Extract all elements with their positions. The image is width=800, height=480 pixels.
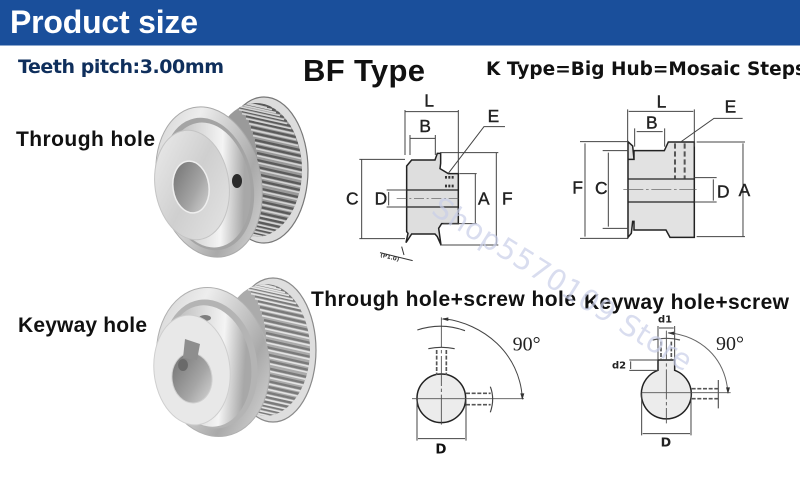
diagram: BF type cross section: F bbox=[502, 188, 513, 208]
diagram: K type cross section: B bbox=[646, 113, 658, 133]
diagram: K type cross section: L bbox=[657, 91, 667, 111]
label: keyway hole: Keyway hole bbox=[18, 314, 147, 337]
diagram: keyway hole with screw bbox=[612, 315, 744, 450]
diagram: K type cross section: F bbox=[572, 177, 583, 197]
diagram: through hole with screw hole: D bbox=[435, 443, 446, 458]
watermark: Shop5570109 Store bbox=[426, 190, 699, 378]
K type note: K Type=Big Hub=Mosaic Steps bbox=[486, 59, 800, 80]
label: through hole plus screw hole: Through hole+screw hole bbox=[311, 288, 576, 311]
diagram: keyway hole with screw: 90° bbox=[716, 333, 744, 355]
diagram: K type cross section: E bbox=[725, 97, 736, 117]
photo: through hole pulley bbox=[154, 96, 309, 258]
label: through hole: Through hole bbox=[16, 128, 155, 151]
BF type heading: BF Type bbox=[303, 53, 425, 88]
title: Product size bbox=[10, 4, 198, 40]
diagram: BF type cross section: E bbox=[488, 106, 499, 126]
diagram: BF type cross section: D bbox=[375, 188, 387, 208]
diagram: through hole with screw hole bbox=[412, 317, 541, 458]
photo: keyway pulley bbox=[153, 277, 317, 437]
diagram: BF type cross section bbox=[346, 91, 513, 263]
diagram: keyway hole with screw: d1 bbox=[658, 315, 672, 326]
diagram: BF type cross section: L bbox=[424, 91, 434, 111]
teeth pitch label: Teeth pitch:3.00mm bbox=[18, 56, 224, 78]
diagram: K type cross section: D bbox=[717, 181, 729, 201]
diagram: through hole with screw hole: 90° bbox=[513, 334, 541, 356]
diagram: BF type cross section: A bbox=[478, 188, 490, 208]
diagram: BF type cross section: C bbox=[346, 188, 359, 208]
diagram: K type cross section: A bbox=[739, 180, 751, 200]
diagram: keyway hole with screw: D bbox=[661, 435, 671, 450]
header bar bbox=[0, 0, 800, 46]
diagram: BF type cross section: (P1.0) bbox=[380, 253, 400, 263]
label: keyway hole plus screw: Keyway hole+screw bbox=[584, 291, 790, 314]
diagram: BF type cross section: B bbox=[419, 116, 431, 136]
diagram: keyway hole with screw: d2 bbox=[612, 361, 626, 372]
diagram: K type cross section: C bbox=[595, 178, 608, 198]
diagram: K type cross section bbox=[572, 91, 751, 238]
